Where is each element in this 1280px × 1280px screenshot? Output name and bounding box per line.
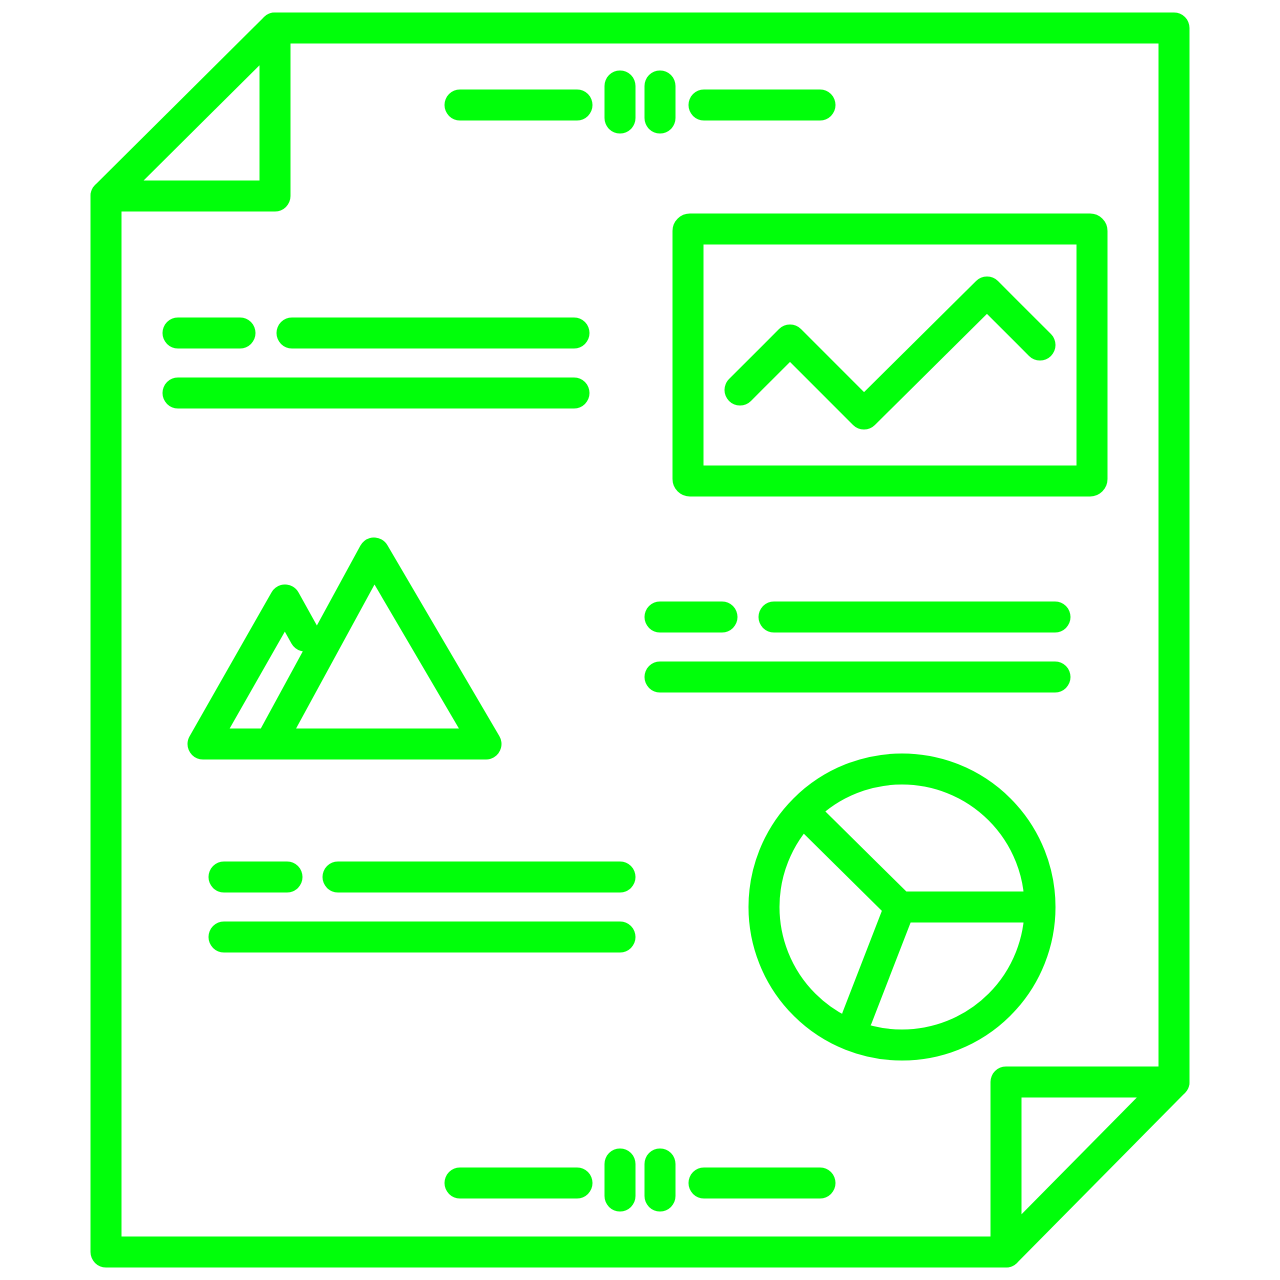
text block 3 (224, 877, 620, 937)
page outline (106, 28, 1174, 1252)
text block 1 (178, 333, 574, 393)
pie chart (764, 769, 1040, 1045)
bottom decoration (460, 1164, 820, 1196)
text block 2 (660, 617, 1055, 677)
line chart panel (688, 229, 1092, 481)
icon: mountains image (203, 553, 486, 744)
top decoration (460, 86, 820, 118)
